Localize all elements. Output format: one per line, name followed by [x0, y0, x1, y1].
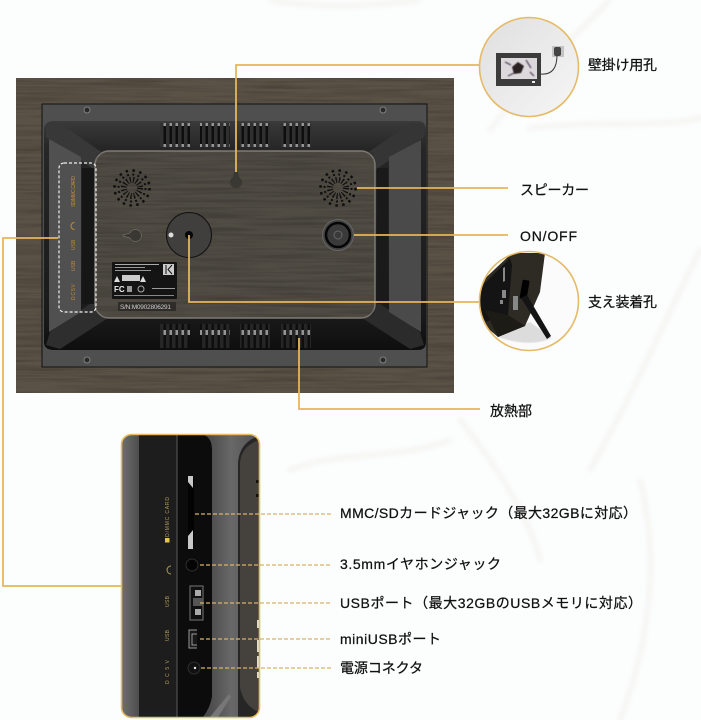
serial number: S/N:M0902806291 [120, 304, 171, 311]
port labels [165, 497, 171, 684]
callout: wall mounting photo [480, 18, 578, 116]
power button [322, 220, 354, 250]
icon: wall-mount keyhole left [123, 230, 141, 241]
side panels [49, 139, 421, 332]
stand socket [166, 212, 212, 258]
leader line: heat vents [299, 338, 480, 409]
port labels: SD/MMC CARD [165, 497, 171, 541]
leader line: wall mount [236, 65, 480, 172]
earphone jack [186, 559, 198, 571]
label: wall mount hole: 壁掛け用孔 [588, 57, 657, 73]
top vents [160, 123, 311, 147]
rating label: FC [114, 285, 125, 294]
dashed leader: power [201, 667, 332, 669]
dashed leader: SD [195, 513, 332, 515]
side port labels: DC5V [71, 283, 77, 300]
dashed leader: mini USB [200, 638, 332, 640]
power jack [188, 662, 200, 674]
dashed leader: USB [200, 602, 332, 604]
side port labels: USB [71, 239, 77, 250]
bottom vents [160, 324, 311, 348]
label: USB port: USBポート（最大32GBのUSBメモリに対応） [340, 595, 642, 611]
icon: left speaker grille [114, 170, 150, 206]
label: on/off: ON/OFF [520, 228, 577, 244]
label: earphone jack: 3.5mmイヤホンジャック [340, 556, 501, 572]
leader line: on/off [354, 234, 508, 236]
side port labels [71, 176, 77, 300]
label: power connector: 電源コネクタ [340, 660, 423, 676]
black rear housing [44, 121, 426, 350]
SD card slot [188, 476, 194, 549]
serial number [118, 302, 176, 311]
port labels: USB [165, 629, 171, 641]
leader line: stand mount [189, 235, 480, 302]
leader line: speaker [357, 187, 508, 189]
background blossom branches [270, 0, 701, 720]
side port labels: SD/MMC CARD [71, 176, 77, 207]
dashed leader: earphone [200, 564, 332, 566]
label: mini USB port: miniUSBポート [340, 631, 441, 647]
label: heat dissipation: 放熱部 [490, 403, 532, 419]
port labels: DC5V [165, 659, 171, 684]
wood centre panel [95, 151, 375, 318]
mini USB port [189, 630, 197, 648]
label: stand mount hole: 支え装着孔 [588, 294, 657, 310]
leader line: ports to detail [3, 238, 122, 586]
dashed highlight around ports [59, 163, 96, 312]
panel: port detail [122, 434, 260, 718]
metal plate [42, 104, 427, 367]
product photo: rear of frame [16, 78, 454, 393]
callout: stand mount photo [478, 252, 578, 350]
label: card slot: MMC/SDカードジャック（最大32GBに対応） [340, 505, 637, 521]
port labels: USB [165, 595, 171, 607]
icon: wall-mount keyhole top [230, 172, 242, 188]
wood backdrop [16, 78, 454, 393]
rating label [112, 262, 177, 299]
USB port [190, 586, 203, 620]
icon: right speaker grille [320, 170, 356, 206]
side port labels: USB [71, 260, 77, 271]
label: speaker: スピーカー [520, 182, 589, 198]
